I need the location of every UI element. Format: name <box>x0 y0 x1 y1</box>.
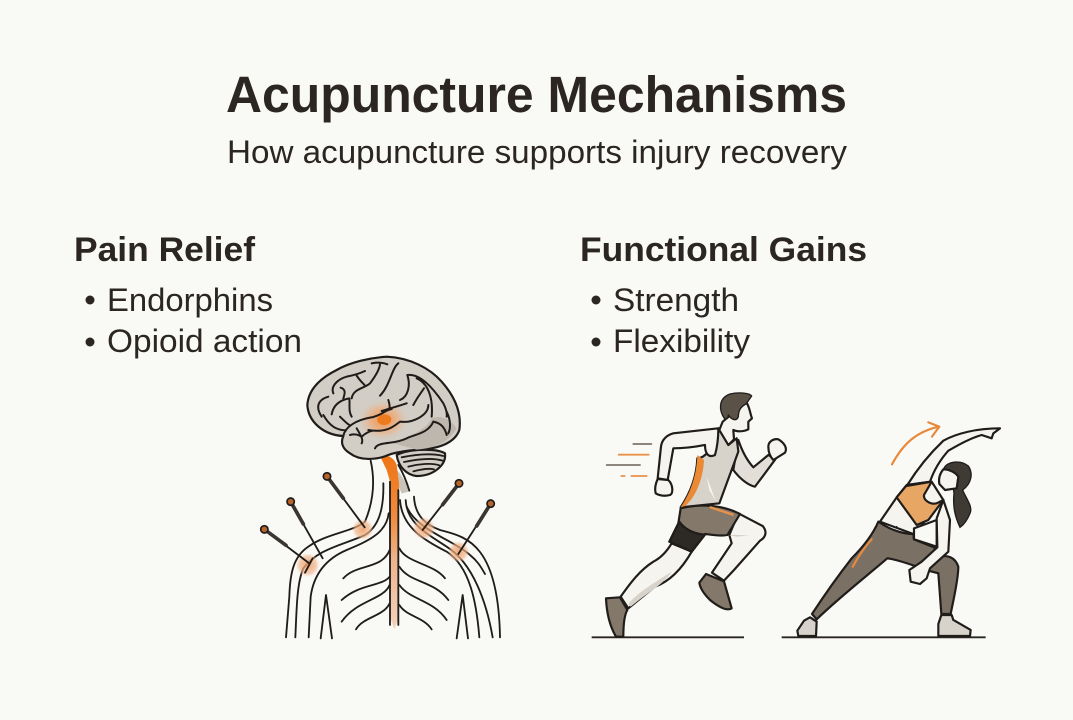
panel: functional gains text <box>580 231 867 359</box>
needle 1 <box>261 526 313 573</box>
illustration: stretching woman <box>782 422 1000 637</box>
left shoe <box>797 617 817 636</box>
right shoe <box>938 615 971 636</box>
front shoe <box>699 574 732 609</box>
nervous system <box>261 455 500 638</box>
leg highlight <box>853 539 872 567</box>
subtitle: How acupuncture supports injury recovery <box>227 134 847 170</box>
shorts <box>669 506 740 552</box>
heading: functional gains: Functional Gains <box>580 231 867 269</box>
raised arm <box>907 428 1000 485</box>
bullet: strength: Strength <box>613 282 739 318</box>
illustration: runner <box>592 393 786 637</box>
arm gap <box>914 520 937 547</box>
brain shading <box>390 417 457 450</box>
needle 5 <box>458 500 494 554</box>
back shoe <box>606 597 627 637</box>
nerves <box>286 461 500 638</box>
hair <box>944 462 971 527</box>
cerebellum <box>397 450 445 476</box>
acupuncture needles <box>261 473 494 573</box>
bullet: flexibility: Flexibility <box>613 323 750 359</box>
needle 4 <box>423 480 463 530</box>
torso <box>681 428 738 507</box>
motion arrow <box>892 422 939 464</box>
bullet: endorphins: Endorphins <box>107 282 273 318</box>
front fist <box>768 439 786 460</box>
front arm <box>733 440 775 487</box>
bullet: opioid action: Opioid action <box>107 323 302 359</box>
back arm <box>658 428 718 480</box>
sports top <box>897 482 943 525</box>
title: Acupuncture Mechanisms <box>226 66 847 123</box>
heading: pain relief: Pain Relief <box>74 231 256 269</box>
speed lines <box>607 444 651 476</box>
neck and head <box>719 403 752 445</box>
back fist <box>655 479 672 496</box>
illustration: brain and nervous system with needles <box>261 357 500 638</box>
hair <box>720 393 752 420</box>
brain <box>307 357 460 476</box>
needle 2 <box>287 498 323 558</box>
acupoint glows <box>296 517 469 577</box>
torso <box>880 482 943 534</box>
brain folds <box>343 403 433 448</box>
cerebrum <box>307 357 460 459</box>
needle 3 <box>323 473 365 527</box>
back leg <box>621 543 692 608</box>
brain stem <box>382 456 410 493</box>
activation glow <box>359 401 407 439</box>
navel <box>895 526 899 528</box>
head <box>939 469 958 490</box>
panel: pain relief text <box>74 231 302 359</box>
spinal cord <box>380 455 399 629</box>
ground line: runner <box>592 635 744 640</box>
leggings <box>812 522 958 619</box>
front leg <box>712 513 765 581</box>
ground line: stretch <box>782 635 986 640</box>
lower arm <box>909 500 950 584</box>
